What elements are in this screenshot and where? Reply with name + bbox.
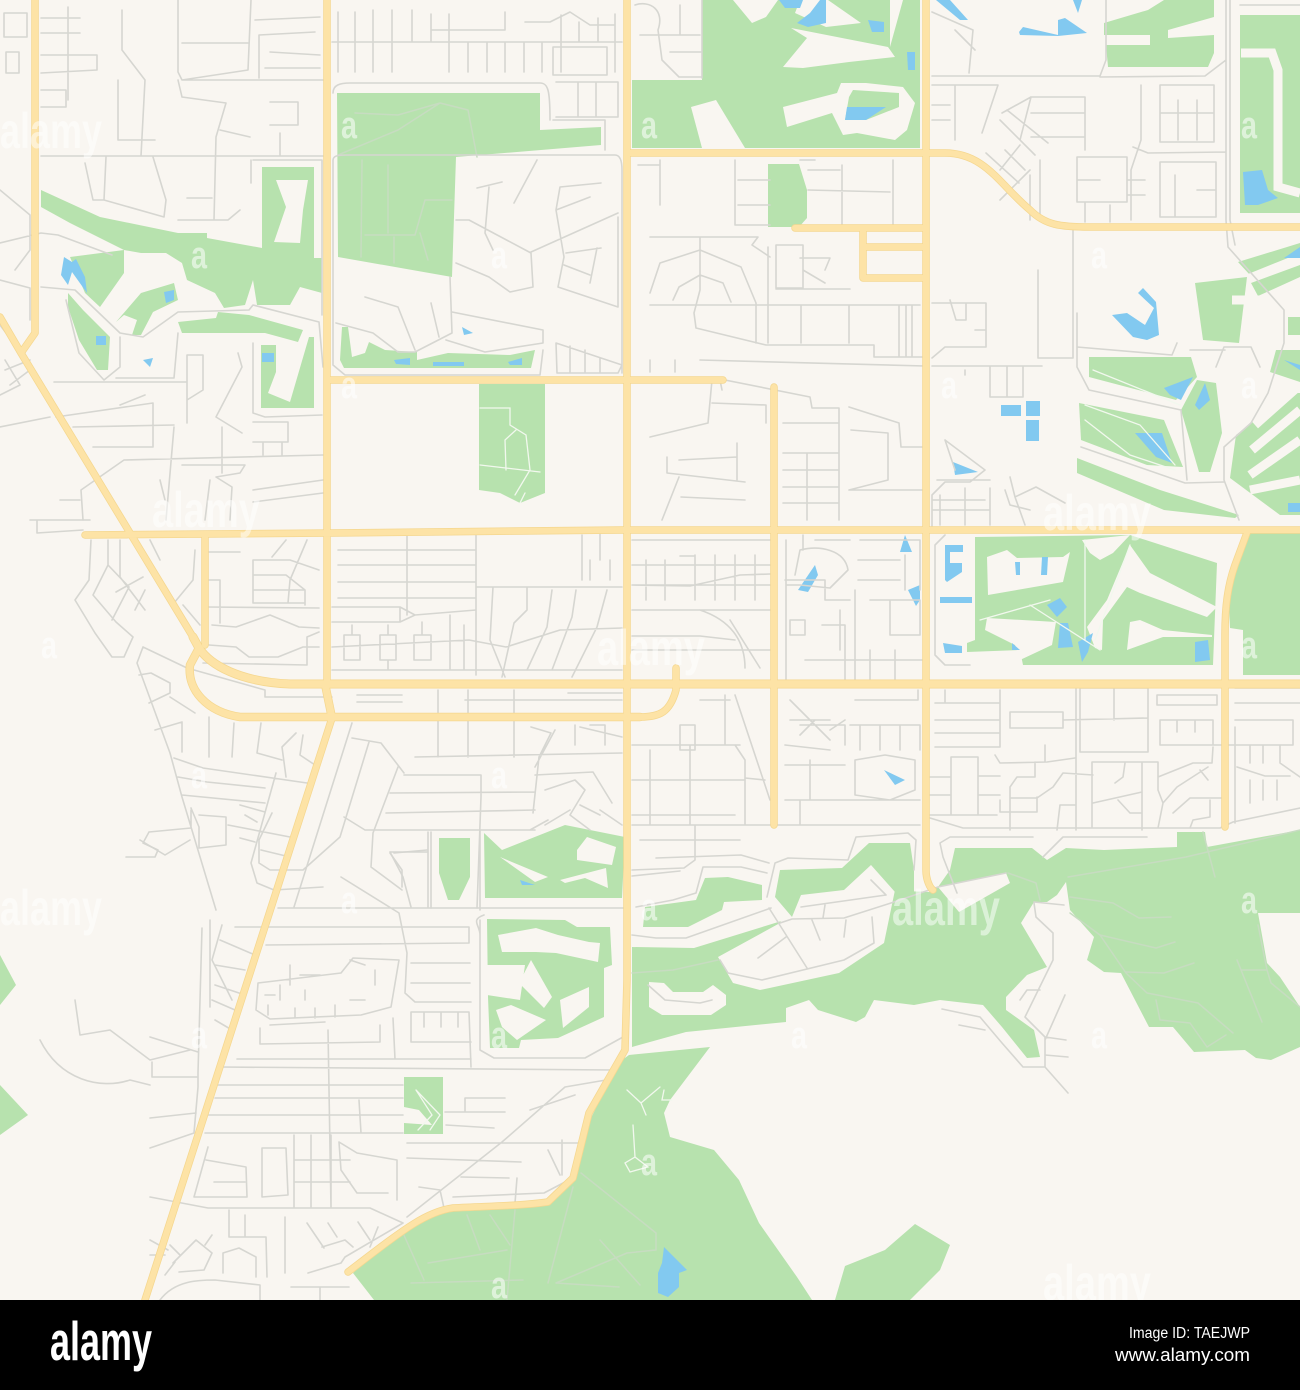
stock watermark words: alamy (892, 880, 1000, 936)
stock watermark letters: a (1241, 880, 1258, 922)
streets: centre below arterial (632, 690, 920, 870)
stock watermark words: alamy (597, 620, 705, 676)
stock watermark letters: a (641, 1142, 658, 1184)
streets: centre north (638, 160, 1260, 520)
stock watermark words: alamy (1043, 1255, 1151, 1311)
streets: north centre (332, 10, 622, 375)
stock watermark letters: a (1091, 235, 1108, 277)
streets: south of arterial centre (632, 535, 970, 680)
streets: south-west and south (150, 830, 625, 1300)
streets: below twin arterial west (126, 647, 622, 910)
image ID: Image ID: TAEJWP (1129, 1325, 1250, 1342)
stock watermark letters: a (491, 1265, 508, 1307)
streets: north-west (0, 0, 325, 520)
stock watermark words: alamy (1043, 485, 1151, 541)
stock watermark letters: a (191, 755, 208, 797)
stock watermark letters: a (341, 880, 358, 922)
stock watermark letters: a (491, 1015, 508, 1057)
stock watermark letters: a (791, 1015, 808, 1057)
stock watermark letters: a (491, 755, 508, 797)
footer logo: alamy (50, 1310, 152, 1372)
stock watermark letters: a (941, 365, 958, 407)
stock watermark letters: a (341, 105, 358, 147)
footer bar (0, 1300, 1300, 1390)
streets: west hills (30, 395, 190, 1085)
road bands through green areas (1232, 53, 1300, 490)
white trails on green (416, 370, 1180, 1172)
streets: top-centre blocks (635, 0, 1300, 520)
stock watermark letters: a (641, 887, 658, 929)
stock watermark letters: a (641, 105, 658, 147)
stock watermark words: alamy (0, 103, 102, 159)
website: www.alamy.com (1114, 1345, 1250, 1365)
streets: south of arterial west (75, 530, 622, 677)
stock watermark words (0, 103, 1151, 1311)
stock watermark letters: a (1241, 365, 1258, 407)
stock watermark letters: a (1091, 1015, 1108, 1057)
green lobes over clearings (643, 90, 914, 927)
stock watermark words: alamy (0, 880, 102, 936)
stock watermark letters: a (1241, 625, 1258, 667)
stock watermark letters: a (191, 235, 208, 277)
streets: clearing and hills east (632, 833, 1068, 1093)
stock watermark letters: a (1241, 105, 1258, 147)
stock watermark letters: a (41, 625, 58, 667)
paths inside green areas (338, 103, 1300, 1300)
cream clearings inside green areas (274, 0, 1217, 1125)
stock watermark words: alamy (152, 482, 260, 538)
streets: east below arterial (930, 687, 1300, 893)
streets: centre-east small (932, 440, 1065, 528)
stock watermark letters: a (491, 235, 508, 277)
stock watermark letters: a (191, 1015, 208, 1057)
stock watermark letters: a (341, 365, 358, 407)
